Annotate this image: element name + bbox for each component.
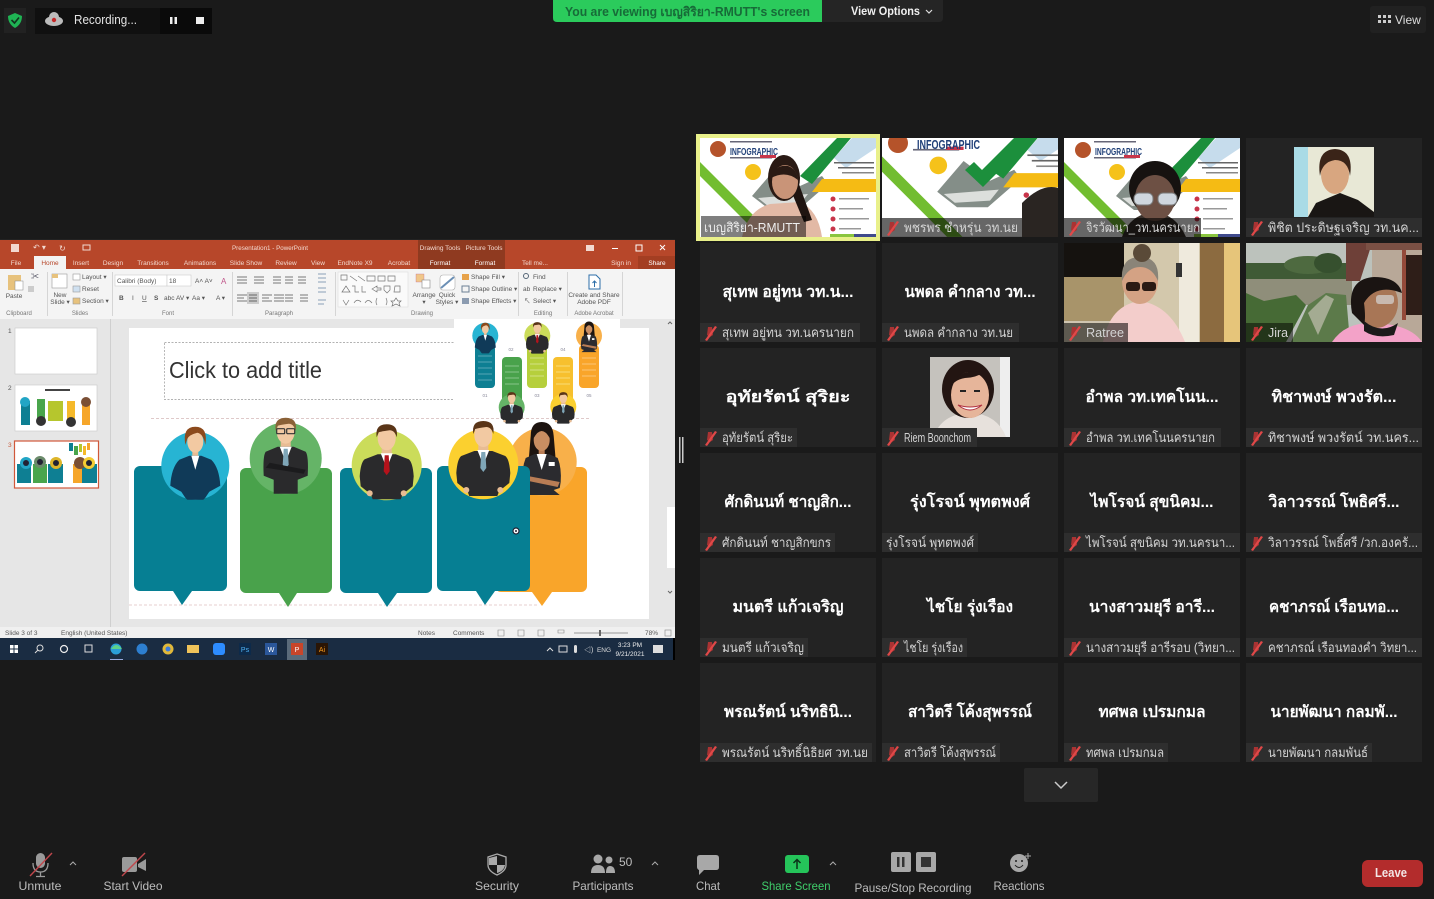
orange card and person (495, 422, 587, 606)
pasted small infographic: 02 (508, 347, 514, 352)
toolbar: share screen (762, 855, 836, 893)
slides group: Slides (72, 311, 88, 317)
ribbon tabs (11, 256, 675, 269)
tile: มนตรี: มนตรี แก้วเจริญ (722, 640, 804, 655)
drawing group: Shape Outline ▾ (471, 286, 518, 293)
font group: A˄ A˅ (195, 278, 213, 285)
ribbon tabs: Review (275, 260, 297, 267)
tile: ศักดินนท์ (700, 453, 876, 552)
clipboard group: Clipboard (6, 311, 32, 317)
toolbar: participants (572, 854, 658, 893)
tile: ทิชาพงษ์: ทิชาพงษ์ พวงรัตน์ วท.นคร... (1268, 430, 1419, 445)
windows taskbar: P (295, 647, 300, 654)
tile: host with highlight (696, 134, 880, 241)
pasted small infographic (454, 319, 620, 424)
drawing group: Shape Fill ▾ (471, 274, 506, 281)
view options button (822, 0, 943, 22)
tile: คชาภรณ์: คชาภรณ์ เรือนทองคำ วิทยา... (1268, 640, 1417, 655)
tile: poster with name พชรพร (880, 128, 1074, 237)
tile: คชาภรณ์: คชาภรณ์ เรือนทอ... (1269, 597, 1399, 616)
font group: A ▾ (216, 295, 226, 302)
tile: วิลาวรรณ์: วิลาวรรณ์ โพธิศรี... (1268, 491, 1400, 511)
slides group (50, 274, 109, 317)
tile: สาวิตรี: สาวิตรี โค้งสุพรรณ์ (908, 701, 1032, 722)
clipboard group (6, 272, 39, 317)
editing group: Select ▾ (533, 298, 557, 305)
tile: photo Riem (882, 348, 1058, 447)
title bar: Picture Tools (465, 245, 503, 252)
tile: photo Riem: Riem Boonchom (904, 430, 971, 445)
slide thumbnail pane (8, 319, 111, 627)
tile: สุเทพ (700, 243, 876, 342)
view layout button (1370, 6, 1426, 33)
teal card 1 and person (134, 427, 229, 605)
editing group: Replace ▾ (533, 286, 563, 293)
font group: B (119, 295, 124, 302)
windows taskbar: W (268, 647, 275, 654)
ribbon tabs: Sign in (611, 260, 631, 267)
toolbar: share screen: Share Screen (762, 879, 830, 893)
security shield icon (4, 8, 26, 33)
windows taskbar: Ai (319, 647, 326, 654)
teal card 4 and person (437, 421, 530, 605)
tile: นพดล: นพดล คำกลาง วท... (904, 283, 1036, 301)
tile: วิลาวรรณ์ (1246, 453, 1422, 552)
drawing group (338, 272, 518, 317)
windows taskbar: Ps (241, 647, 250, 654)
ribbon tabs: Slide Show (230, 260, 263, 267)
ribbon tabs: EndNote X9 (337, 260, 373, 267)
toolbar: start video (104, 853, 163, 893)
ribbon tabs: View (311, 260, 325, 267)
view options button: View Options (851, 4, 920, 18)
tile: photo พิชิต: พิชิต ประดิษฐเจริญ วท.นค... (1268, 220, 1419, 236)
editing group (523, 274, 563, 317)
slide thumbnail pane: 3 (8, 442, 12, 449)
tile: มนตรี (700, 558, 876, 657)
toolbar: participants: Participants (572, 879, 634, 893)
editing group: Find (533, 274, 546, 281)
title bar: ↶ ▾ (33, 243, 46, 252)
slides group: Reset (82, 286, 99, 293)
tile: นางสาวมยุรี: นางสาวมยุรี อารีรอบ (วิทยา... (1086, 640, 1235, 656)
tile: พรณรัตน์: พรณรัตน์ นริทธินิ... (724, 702, 852, 721)
font group: abc (164, 295, 175, 302)
tile: photo พิชิต (1246, 138, 1422, 237)
ribbon (0, 269, 675, 319)
slides group: Section ▾ (82, 298, 109, 305)
tile: poster with name จิรวัฒนา: จิรวัฒนา_วท.นครนายก (1086, 220, 1200, 235)
tile: ไพโรจน์ (1064, 453, 1240, 552)
ribbon tabs: File (11, 260, 22, 267)
tile: ไพโรจน์: ไพโรจน์ สุขนิคม... (1089, 491, 1214, 512)
tile: ศักดินนท์: ศักดินนท์ ชาญสิกขกร (722, 535, 831, 550)
tile: host with highlight: เบญสิริยา-RMUTT (704, 220, 800, 235)
pasted small infographic: 03 (534, 393, 540, 398)
editing group: ab (523, 286, 531, 293)
tile: ไชโย: ไชโย รุ่งเรือง (925, 596, 1013, 617)
tile: อุทัยรัตน์: อุทัยรัตน์ สุริยะ (726, 387, 850, 407)
clipboard group: Paste (6, 293, 23, 300)
title bar: ↻ (59, 244, 66, 253)
acrobat group: Create and Share (568, 292, 620, 299)
tile: อุทัยรัตน์ (700, 348, 876, 447)
title bar: Drawing Tools (420, 245, 461, 252)
font group: AV ▾ (176, 295, 190, 302)
font group: Font (162, 311, 174, 317)
paragraph group (237, 274, 326, 317)
divider handle (679, 437, 684, 463)
tile: ทศพล: ทศพล เปรมกมล (1086, 745, 1164, 760)
slide canvas (129, 328, 649, 619)
tile: อำพล: อำพล วท.เทคโนนครนายก (1086, 430, 1215, 445)
font group: I (132, 295, 134, 302)
title bar (0, 239, 675, 269)
shared PowerPoint window (0, 239, 675, 660)
toolbar: reactions: Reactions (994, 879, 1044, 893)
tile: คชาภรณ์ (1246, 558, 1422, 657)
drawing group: Shape Effects ▾ (471, 298, 517, 305)
windows taskbar: 9/21/2021 (616, 651, 645, 658)
slides group: New (53, 292, 67, 299)
ribbon tabs: Design (103, 260, 124, 267)
windows taskbar (0, 638, 675, 660)
title placeholder (164, 342, 474, 400)
viewing banner: You are viewing เบญสิริยา-RMUTT's screen (565, 5, 810, 19)
ribbon tabs: Format (475, 260, 495, 267)
status bar: Comments (453, 630, 485, 637)
ribbon tabs: Format (430, 260, 450, 267)
windows taskbar: 3:23 PM (618, 642, 642, 649)
guide lines (151, 418, 590, 420)
leave button: Leave (1375, 866, 1407, 880)
viewing banner (553, 0, 822, 22)
drawing group: Arrange (412, 292, 436, 299)
tile: รุ่งโรจน์: รุ่งโรจน์ พุทตพงศ์ (910, 491, 1031, 512)
tile: poster with name จิรวัฒนา: INFOGRAPHIC (1095, 147, 1142, 158)
tile: อุทัยรัตน์: อุทัยรัตน์ สุริยะ (722, 430, 793, 446)
status bar: Notes (418, 630, 436, 637)
next page arrow button (1024, 768, 1098, 802)
drawing group: Quick (439, 292, 456, 299)
clipboard group: ✂ (31, 272, 39, 281)
tile: สุเทพ: สุเทพ อยู่ทน วท.นครนายก (722, 325, 854, 341)
tile: อำพล: อำพล วท.เทคโนน... (1086, 386, 1218, 406)
title bar: Presentation1 - PowerPoint (232, 245, 308, 252)
editing group: Editing (534, 311, 552, 317)
toolbar: reactions (994, 853, 1044, 893)
toolbar: chat: Chat (696, 879, 721, 893)
tile: poster with name พชรพร: INFOGRAPHIC (917, 137, 980, 152)
drawing group: ▾ (422, 299, 426, 306)
drawing group: Drawing (411, 311, 433, 317)
tile: photo Jira: Jira (1268, 325, 1289, 340)
tile: รุ่งโรจน์ (882, 453, 1058, 552)
pasted small infographic: 01 (482, 393, 488, 398)
font group: Aa ▾ (192, 295, 206, 302)
title placeholder: Click to add title (169, 357, 322, 383)
tile: สาวิตรี: สาวิตรี โค้งสุพรรณ์ (904, 745, 996, 761)
tile: นายพัฒนา: นายพัฒนา กลมพั... (1270, 703, 1398, 721)
tile: photo Jira (1246, 243, 1422, 342)
toolbar: start video: Start Video (104, 879, 163, 893)
font group: Calibri (Body) (117, 278, 156, 285)
recording indicator (35, 8, 212, 34)
windows taskbar: ◁) (584, 646, 593, 654)
tile: host with highlight: INFOGRAPHIC (730, 147, 778, 158)
tile: นางสาวมยุรี: นางสาวมยุรี อารี... (1089, 597, 1215, 617)
pasted small infographic: 04 (560, 347, 566, 352)
tile: photo Ratree (1064, 243, 1240, 342)
tile: รุ่งโรจน์: รุ่งโรจน์ พุทตพงศ์ (886, 535, 975, 551)
toolbar: unmute: Unmute (18, 879, 62, 893)
ribbon tabs: Animations (184, 260, 217, 267)
acrobat group: Adobe Acrobat (574, 311, 614, 317)
paragraph group: Paragraph (265, 311, 293, 317)
ribbon tabs: Acrobat (388, 260, 410, 267)
toolbar: security: Security (475, 879, 519, 893)
slides group: Slide ▾ (50, 299, 70, 306)
slide thumbnail pane: 1 (8, 328, 12, 335)
toolbar: chat (696, 855, 721, 893)
green card and person (240, 418, 332, 607)
vertical scrollbar (665, 319, 675, 627)
tile: มนตรี: มนตรี แก้วเจริญ (732, 597, 844, 617)
tile: สุเทพ: สุเทพ อยู่ทน วท.น... (722, 284, 854, 303)
view layout button: View (1395, 13, 1421, 27)
status bar: Slide 3 of 3 (5, 630, 38, 637)
tile: photo Ratree: Ratree (1086, 325, 1124, 340)
toolbar: security (475, 854, 519, 893)
ribbon tabs: Insert (73, 260, 89, 267)
slides group: Layout ▾ (82, 274, 107, 281)
tile: ทศพล (1064, 663, 1240, 762)
tile: ทศพล: ทศพล เปรมกมล (1098, 704, 1206, 721)
rotate cursor (513, 528, 519, 534)
tile: ไชโย: ไชโย รุ่งเรือง (903, 640, 963, 656)
recording indicator: Recording... (74, 12, 137, 27)
ribbon tabs: Transitions (137, 260, 170, 267)
tile: นพดล (882, 243, 1058, 342)
ribbon tabs: Home (41, 260, 59, 267)
tile: นายพัฒนา: นายพัฒนา กลมพันธ์ (1268, 745, 1368, 760)
tile: ทิชาพงษ์: ทิชาพงษ์ พวงรัต... (1272, 387, 1396, 406)
status bar: English (United States) (61, 630, 127, 637)
tile: อำพล (1064, 348, 1240, 447)
font group: U (142, 295, 147, 302)
tile: นางสาวมยุรี (1064, 558, 1240, 657)
tile: poster with name พชรพร: พชรพร ชำหรุ่น วท.นย (904, 220, 1018, 236)
tile: วิลาวรรณ์: วิลาวรรณ์ โพธิ์ศรี /วก.องครั... (1267, 533, 1418, 550)
tile: ไชโย (882, 558, 1058, 657)
tile: ศักดินนท์: ศักดินนท์ ชาญสิก... (724, 492, 852, 512)
acrobat group (568, 275, 620, 317)
toolbar: unmute (18, 853, 76, 893)
teal card 3 and person (340, 424, 432, 607)
drawing group: Styles ▾ (436, 299, 459, 306)
toolbar: participants: 50 (619, 855, 633, 869)
toolbar: pause stop recording (854, 852, 972, 895)
font group: S (154, 295, 159, 302)
acrobat group: Adobe PDF (577, 299, 611, 306)
font group: A (221, 277, 227, 286)
slide thumbnail pane: 2 (8, 385, 12, 392)
status bar: 78% (645, 630, 658, 637)
font group: 18 (169, 278, 177, 285)
leave button (1362, 860, 1423, 887)
tile: นพดล: นพดล คำกลาง วท.นย (904, 325, 1013, 340)
tile: นายพัฒนา (1246, 663, 1422, 762)
toolbar: pause stop recording: Pause/Stop Recording (854, 881, 972, 895)
font group (115, 275, 227, 317)
editing group: ↖ (524, 297, 530, 305)
tile: สาวิตรี (882, 663, 1058, 762)
tile: พรณรัตน์: พรณรัตน์ นริทธิ์นิธิยศ วท.นย (722, 743, 868, 760)
tile: พรณรัตน์ (700, 663, 876, 762)
windows taskbar: ENG (597, 647, 611, 654)
pasted small infographic: 05 (586, 393, 592, 398)
status bar (0, 627, 675, 638)
tile: poster with name จิรวัฒนา (1064, 138, 1240, 237)
tile: ทิชาพงษ์ (1246, 348, 1422, 447)
ribbon tabs: Tell me... (522, 260, 548, 267)
ribbon tabs: Share (648, 260, 666, 267)
tile: ไพโรจน์: ไพโรจน์ สุขนิคม วท.นครนา... (1085, 535, 1235, 551)
